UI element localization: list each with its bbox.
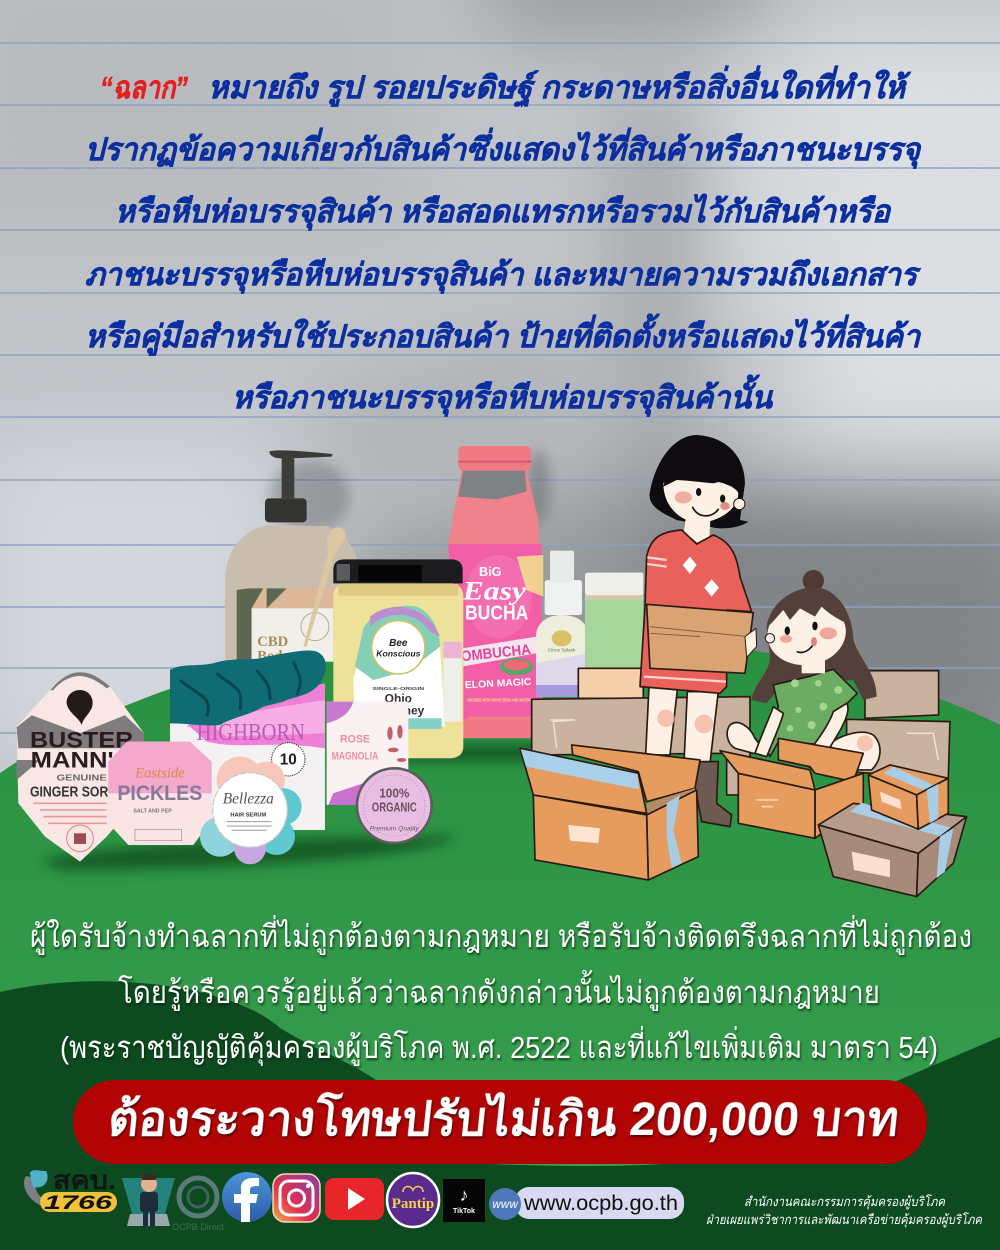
icon: Instagram xyxy=(273,1174,320,1222)
icon: YouTube xyxy=(325,1178,384,1220)
boot xyxy=(695,762,732,827)
product: kombucha bottle: BUCHA xyxy=(465,601,528,624)
product: rose and magnolia box: MAGNOLIA xyxy=(332,750,379,762)
legs xyxy=(646,687,718,763)
hair xyxy=(803,570,824,591)
label: 100% organic: ORGANIC xyxy=(372,800,417,814)
held box xyxy=(647,604,753,673)
heading: definition of label: หรือภาชนะบรรจุหรือหีบห่อบรรจุสินค้านั้น xyxy=(232,374,774,417)
girl standing with box xyxy=(640,435,757,827)
footer credit text xyxy=(706,1194,983,1228)
product: highborn box with scrunchie: 10 xyxy=(280,752,297,769)
icon: TikTok: ♪ xyxy=(460,1185,468,1205)
heading: definition of label: หมายถึง รูป รอยประดิษฐ์ กระดาษหรือสิ่งอื่นใดที่ทำให้ xyxy=(208,65,912,108)
heading: definition of label: หรือหีบห่อบรรจุสินค้า หรือสอดแทรกหรือรวมไว้กับสินค้าหรือ xyxy=(115,193,892,231)
icon: TikTok xyxy=(443,1179,485,1222)
neck xyxy=(684,517,711,545)
product: honey jar: Honey xyxy=(388,704,425,718)
label: 100% organic: 100% xyxy=(379,786,409,800)
penalty pill xyxy=(73,1080,927,1164)
product: honey jar: SINGLE-ORIGIN xyxy=(372,686,425,692)
product: kombucha bottle xyxy=(448,446,550,738)
heading: definition of label: “ฉลาก” xyxy=(100,70,188,105)
heading: definition of label xyxy=(85,65,922,417)
footer credit text: สำนักงานคณะกรรมการคุ้มครองผู้บริโภค xyxy=(744,1194,946,1210)
icon: cartoon officer xyxy=(122,1174,175,1226)
product: kombucha bottle: ELON MAGIC xyxy=(465,677,532,691)
label: Eastside Pickles xyxy=(108,742,212,845)
icon: TikTok: TikTok xyxy=(453,1208,475,1215)
product: honey jar: Ohio xyxy=(385,692,412,706)
product: honey jar: Bee xyxy=(389,638,408,649)
logo: OCPB hotline 1766 xyxy=(24,1165,117,1214)
product: highborn box with scrunchie: HIGHBORN xyxy=(197,720,305,746)
logo: OCPB hotline 1766: 1766 xyxy=(44,1193,113,1214)
label: Eastside Pickles: PICKLES xyxy=(117,781,202,805)
label: Buster Mann's ginger sorrel: GINGER SOR xyxy=(30,785,109,801)
arms xyxy=(755,707,783,757)
product: rose and magnolia box xyxy=(327,702,408,805)
penalty pill: ต้องระวางโทษปรับไม่เกิน 200,000 บาท xyxy=(106,1091,902,1145)
product: rose and magnolia box: ROSE xyxy=(340,734,370,746)
label: Buster Mann's ginger sorrel: BUSTER xyxy=(30,727,133,752)
icon: Facebook xyxy=(222,1172,272,1222)
website link badge: www.ocpb.go.th xyxy=(523,1192,678,1215)
open cardboard box: front left xyxy=(520,745,700,880)
legal text xyxy=(30,915,972,1067)
heading: definition of label: ปรากฏข้อความเกี่ยวกับสินค้าซึ่งแสดงไว้ที่สินค้าหรือภาชนะบรรจุ xyxy=(85,127,922,169)
face xyxy=(763,596,850,670)
product: spray bottle: Citrus Splash xyxy=(548,648,576,653)
product: kombucha bottle: BiG xyxy=(479,565,502,579)
product: honey jar: Konscious xyxy=(376,649,421,659)
dress xyxy=(767,669,857,757)
label: Bellezza hair serum: HAIR SERUM xyxy=(230,813,267,819)
label: Eastside Pickles: Eastside xyxy=(134,765,185,781)
product: highborn box with scrunchie xyxy=(170,651,326,830)
sweater xyxy=(640,530,752,693)
icon: OCPB Direct seal: OCPB Direct xyxy=(172,1222,224,1232)
face xyxy=(663,479,738,523)
green hill background xyxy=(0,632,1000,1250)
heading: definition of label: ภาชนะบรรจุหรือหีบห่อบรรจุสินค้า และหมายความรวมถึงเอกสาร xyxy=(85,257,921,294)
product: kombucha bottle: OMBUCHA xyxy=(460,642,532,665)
product: honey jar xyxy=(333,559,463,758)
website link badge: WWW xyxy=(492,1200,519,1210)
legal text: โดยรู้หรือควรรู้อยู่แล้วว่าฉลากดังกล่าวนั้นไม่ถูกต้องตามกฎหมาย xyxy=(118,970,880,1011)
label: 100% organic: Premium Quality xyxy=(370,826,420,833)
icon: OCPB Direct seal xyxy=(172,1178,224,1232)
product: pump bottle: CBD xyxy=(257,634,288,650)
product: spray bottle xyxy=(536,551,588,697)
logo: OCPB hotline 1766: สคบ. xyxy=(53,1165,116,1195)
legs xyxy=(727,723,767,753)
website link badge xyxy=(489,1187,684,1220)
label: Buster Mann's ginger sorrel xyxy=(17,672,144,862)
small stacked cardboard boxes xyxy=(818,765,967,897)
product: kombucha bottle: Easy xyxy=(461,576,527,605)
product: pump bottle xyxy=(225,450,360,665)
icon: Pantip: Pantip xyxy=(392,1196,434,1212)
product: kombucha bottle: INFUSED WITH HONEYDEW AND WATER xyxy=(467,698,531,703)
heading: definition of label: หรือคู่มือสำหรับใช้ประกอบสินค้า ป้ายที่ติดตั้งหรือแสดงไว้ที่สินค้า xyxy=(85,313,922,356)
girl sitting in box xyxy=(727,570,880,770)
product: pump bottle: Body xyxy=(257,649,291,665)
label: 100% organic xyxy=(357,768,432,843)
label: Eastside Pickles: SALT AND PEP xyxy=(133,809,172,815)
back cardboard boxes xyxy=(532,668,950,795)
icon: Pantip xyxy=(387,1173,439,1227)
dark green lower waves xyxy=(0,981,1000,1250)
label: Buster Mann's ginger sorrel: MANN'S xyxy=(31,747,131,772)
label: Buster Mann's ginger sorrel: GENUINE xyxy=(57,774,108,783)
open cardboard box: centre xyxy=(720,738,863,838)
hair back xyxy=(650,435,748,528)
label: Bellezza hair serum: Bellezza xyxy=(223,790,274,807)
product shadows on the ground xyxy=(40,745,550,870)
product: green tin xyxy=(585,573,643,670)
label: Bellezza hair serum xyxy=(200,757,302,864)
